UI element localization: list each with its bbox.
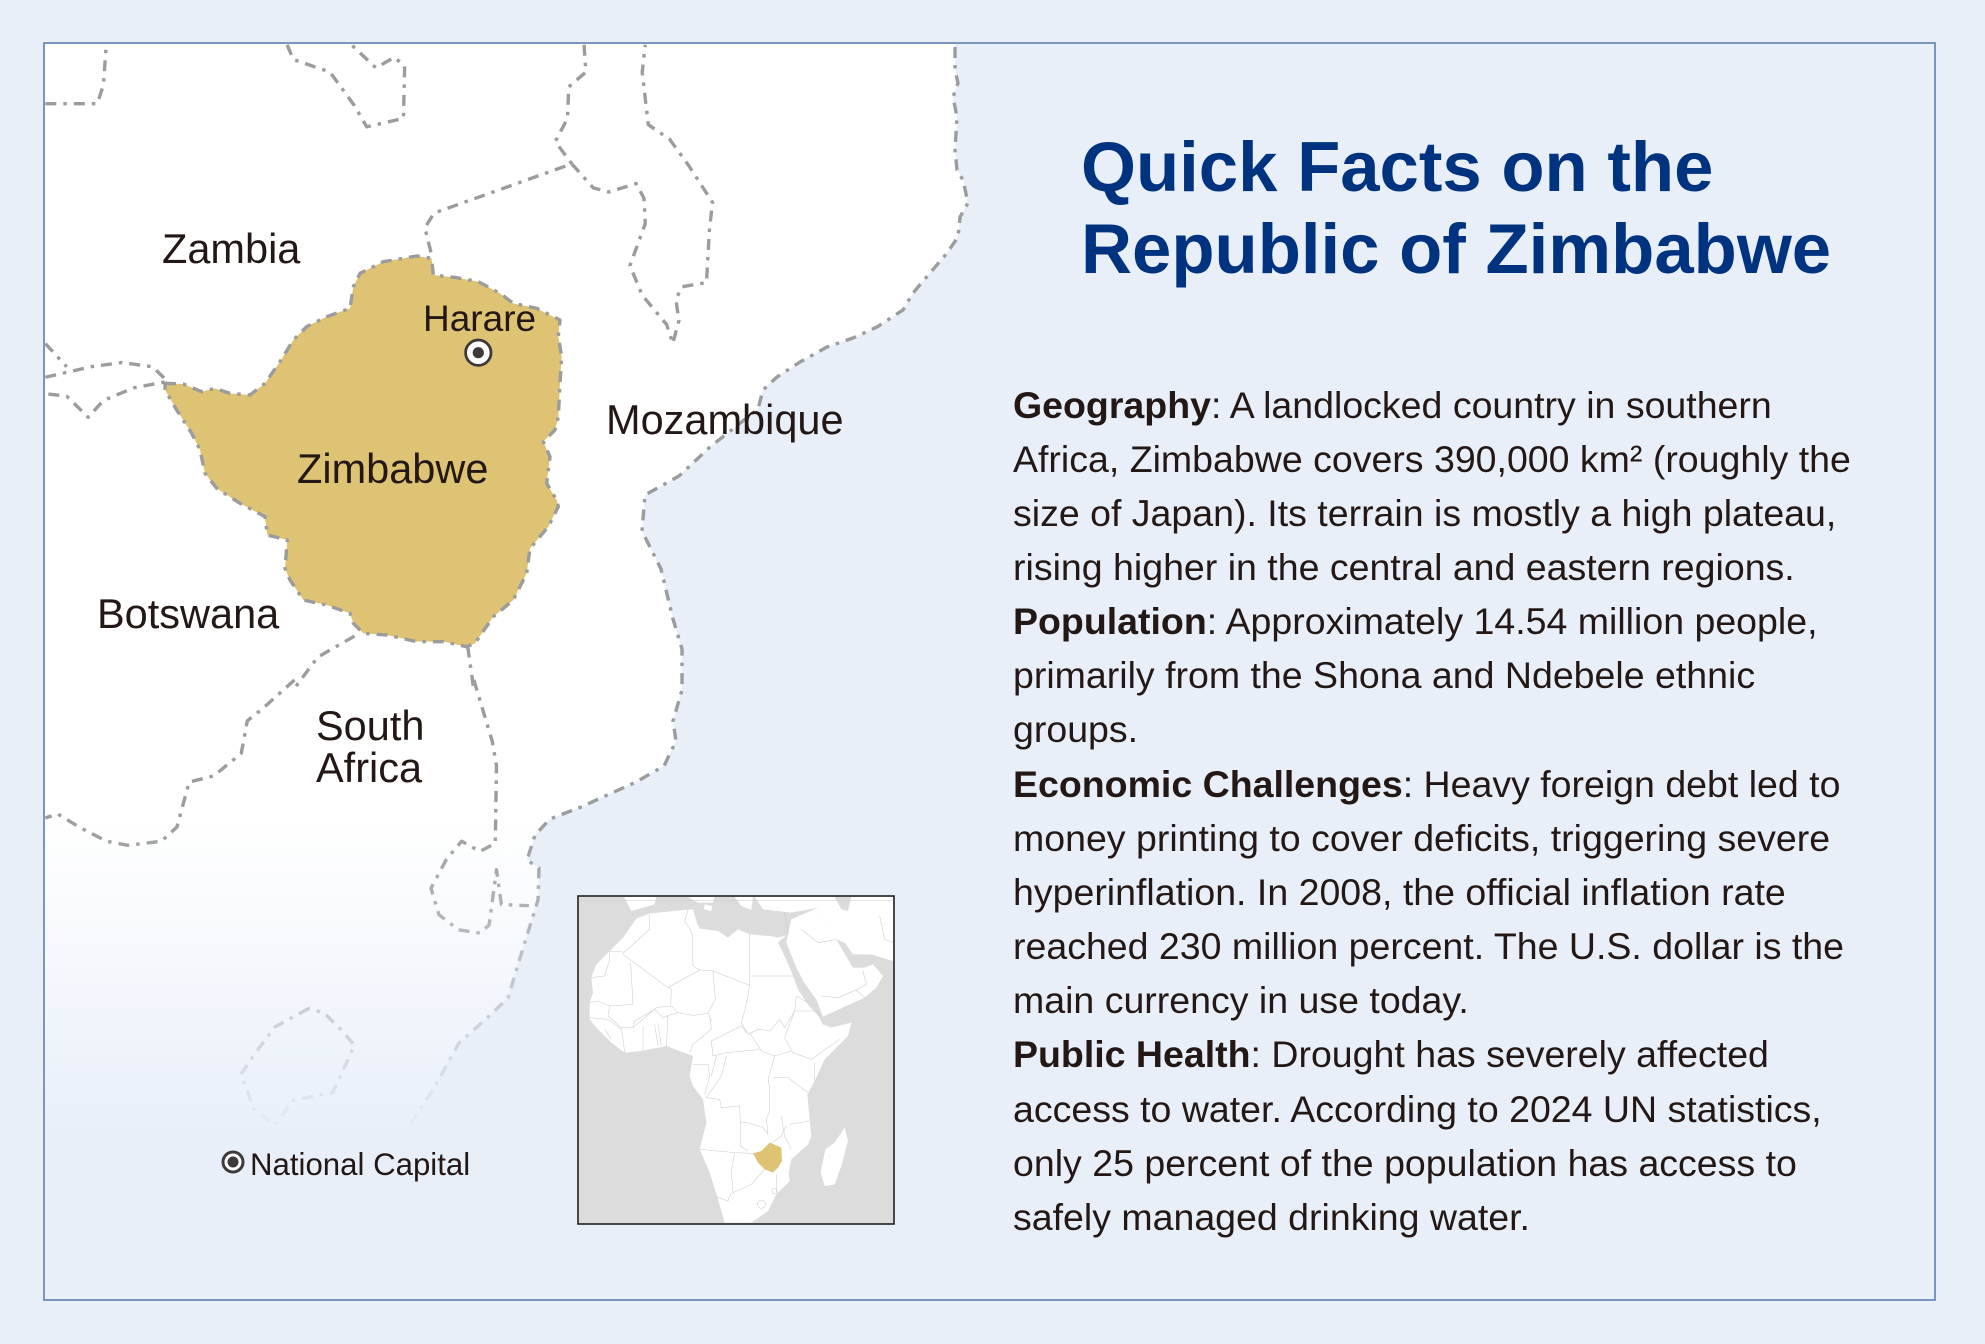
facts text block: safely managed drinking water. (1013, 1196, 1530, 1238)
legend: national capital: National Capital (250, 1147, 470, 1182)
label: Zambia: Zambia (162, 225, 301, 272)
facts text block: Africa, Zimbabwe covers 390,000 km² (roughly the (1013, 438, 1851, 480)
title: Republic of Zimbabwe (1081, 209, 1831, 288)
facts text block: Public Health: Drought has severely affected (1013, 1033, 1769, 1075)
land mass (45, 44, 968, 1028)
facts text block: only 25 percent of the population has access to (1013, 1142, 1797, 1184)
country borders (45, 41, 713, 690)
highlighted Zimbabwe on inset (753, 1143, 782, 1173)
title (1081, 127, 1831, 288)
facts text block: groups. (1013, 708, 1138, 750)
facts text block: Population: Approximately 14.54 million people, (1013, 600, 1818, 642)
main map (45, 41, 968, 1140)
facts text block: main currency in use today. (1013, 979, 1469, 1021)
facts text block: access to water. According to 2024 UN statistics, (1013, 1088, 1822, 1130)
facts text block: rising higher in the central and eastern regions. (1013, 546, 1795, 588)
facts text block (1013, 384, 1851, 1238)
coastline (410, 47, 968, 1125)
label: South Africa: South (316, 702, 424, 749)
facts text block: Geography: A landlocked country in southern (1013, 384, 1772, 426)
facts text block: money printing to cover deficits, triggering severe (1013, 817, 1830, 859)
Zimbabwe shape (165, 256, 562, 647)
label: South Africa: Africa (316, 744, 423, 791)
label: Zimbabwe: Zimbabwe (297, 445, 488, 492)
icon: capital marker Harare (466, 340, 491, 365)
label: Mozambique: Mozambique (606, 396, 844, 443)
facts text block: Economic Challenges: Heavy foreign debt led to (1013, 763, 1840, 805)
title: Quick Facts on the (1081, 127, 1713, 206)
facts text block: reached 230 million percent. The U.S. dollar is the (1013, 925, 1844, 967)
facts text block: size of Japan). Its terrain is mostly a high plateau, (1013, 492, 1836, 534)
inset map of Africa (578, 896, 894, 1224)
facts text block: hyperinflation. In 2008, the official inflation rate (1013, 871, 1786, 913)
facts text block: primarily from the Shona and Ndebele ethnic (1013, 654, 1755, 696)
label: Harare: Harare (423, 298, 536, 339)
label: Botswana: Botswana (97, 590, 280, 637)
bottom fade of the map (45, 848, 540, 1140)
